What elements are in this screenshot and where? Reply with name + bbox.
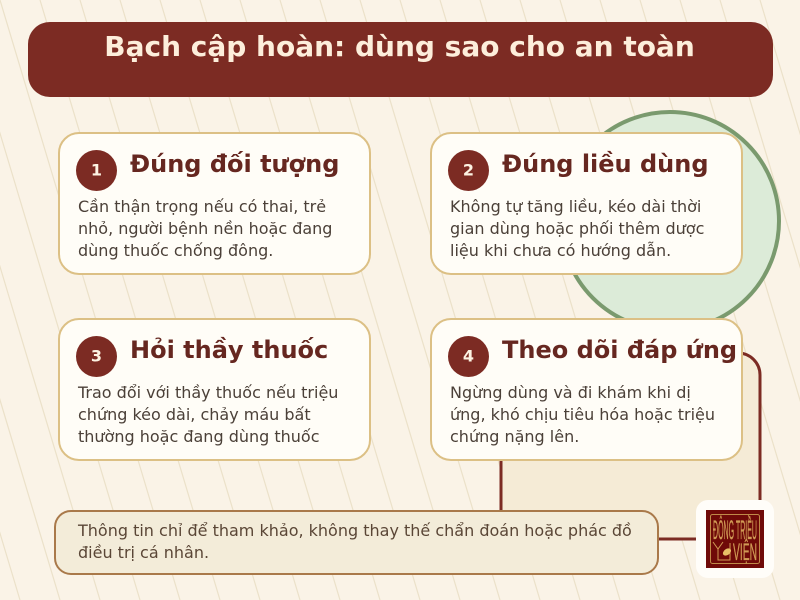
badge 3 (76, 336, 117, 377)
heading 3: Hỏi thầy thuốc (130, 336, 328, 364)
body 2: Không tự tăng liều, kéo dài thời (450, 197, 701, 216)
beige background panel with connector (501, 353, 760, 539)
badge 2 (448, 150, 489, 191)
badge 4: 4 (463, 346, 474, 366)
body 4: ứng, khó chịu tiêu hóa hoặc triệu (450, 405, 715, 424)
badge 3: 3 (91, 346, 102, 366)
badge 2: 2 (463, 160, 474, 180)
disclaimer note: Thông tin chỉ để tham khảo, không thay thế chẩn đoán hoặc phác đồ (77, 521, 632, 540)
heading 2: Đúng liều dùng (502, 150, 709, 178)
panel: card 1 (59, 133, 370, 274)
badge 1: 1 (91, 160, 102, 180)
logo: Đông Triều Y Viện seal (696, 500, 774, 578)
disclaimer note (55, 511, 658, 574)
body 2: liệu khi chưa có hướng dẫn. (450, 241, 671, 260)
panel: card 4 (431, 319, 742, 460)
body 1: dùng thuốc chống đông. (78, 241, 273, 260)
badge 4 (448, 336, 489, 377)
body 3: thường hoặc đang dùng thuốc (78, 427, 320, 446)
disclaimer note: điều trị cá nhân. (78, 543, 209, 562)
panel: card 2 (431, 133, 742, 274)
body 4: Ngừng dùng và đi khám khi dị (450, 383, 691, 402)
body 1: nhỏ, người bệnh nền hoặc đang (78, 219, 332, 238)
panel: card 3 (59, 319, 370, 460)
title banner (28, 22, 773, 97)
body 4: chứng nặng lên. (450, 427, 579, 446)
logo: Đông Triều Y Viện seal: VIỆN (733, 539, 757, 566)
body 1: Cần thận trọng nếu có thai, trẻ (78, 197, 326, 216)
badge 1 (76, 150, 117, 191)
title: Bạch cập hoàn: dùng sao cho an toàn (104, 30, 695, 63)
body 3: Trao đổi với thầy thuốc nếu triệu (77, 383, 338, 402)
body 2: gian dùng hoặc phối thêm dược (450, 219, 704, 238)
body 3: chứng kéo dài, chảy máu bất (78, 405, 311, 424)
heading 1: Đúng đối tượng (130, 150, 339, 178)
heading 4: Theo dõi đáp ứng (502, 336, 737, 364)
decorative green circle (561, 112, 779, 330)
